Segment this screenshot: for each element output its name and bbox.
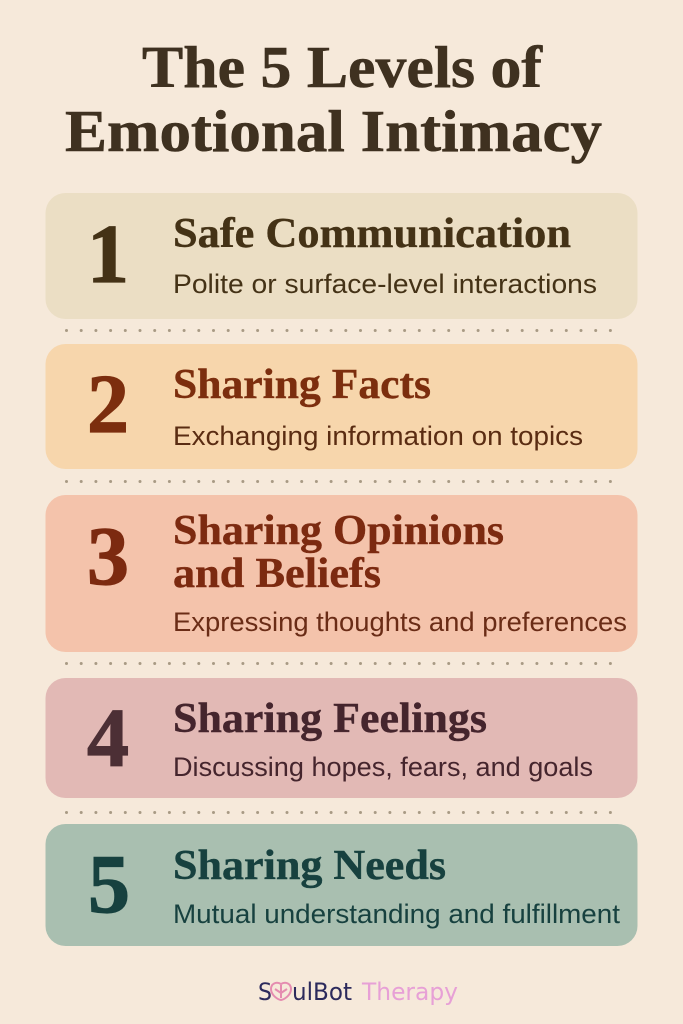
icon: brain heart xyxy=(271,983,291,1000)
heading: Sharing Opinions and Beliefs: and Beliefs xyxy=(173,551,381,597)
panel: level 2 xyxy=(46,344,638,469)
title: The 5 Levels of xyxy=(142,34,543,100)
logo: SoulBot Therapy: S xyxy=(258,978,272,1006)
panel: level 5 xyxy=(46,824,638,946)
logo: SoulBot Therapy: ulBot xyxy=(292,978,352,1006)
heading: Sharing Opinions and Beliefs xyxy=(173,508,504,597)
number 4: 4 xyxy=(87,692,129,785)
heading: Sharing Feelings: Sharing Feelings xyxy=(173,696,487,742)
description: Discussing hopes, fears, and goals xyxy=(173,752,593,782)
heading: Sharing Needs: Sharing Needs xyxy=(173,843,446,889)
number 1: 1 xyxy=(87,208,129,301)
panel: level 1 xyxy=(46,193,638,319)
title xyxy=(65,34,602,164)
panel: level 3 xyxy=(46,495,638,652)
heading: Sharing Facts: Sharing Facts xyxy=(173,362,431,408)
number 2: 2 xyxy=(87,358,129,451)
panel: level 4 xyxy=(46,678,638,798)
description: Polite or surface-level interactions xyxy=(173,269,597,299)
title: Emotional Intimacy xyxy=(65,98,602,164)
description: Exchanging information on topics xyxy=(173,421,583,451)
logo: SoulBot Therapy xyxy=(258,978,458,1006)
number 3: 3 xyxy=(87,510,129,603)
logo: SoulBot Therapy: Therapy xyxy=(361,978,458,1006)
dotted dividers xyxy=(66,330,612,812)
description: Expressing thoughts and preferences xyxy=(173,607,627,637)
heading: Sharing Opinions and Beliefs: Sharing Opinions xyxy=(173,508,504,554)
heading: Safe Communication: Safe Communication xyxy=(173,211,571,257)
description: Mutual understanding and fulfillment xyxy=(173,899,620,929)
number 5: 5 xyxy=(88,838,130,931)
